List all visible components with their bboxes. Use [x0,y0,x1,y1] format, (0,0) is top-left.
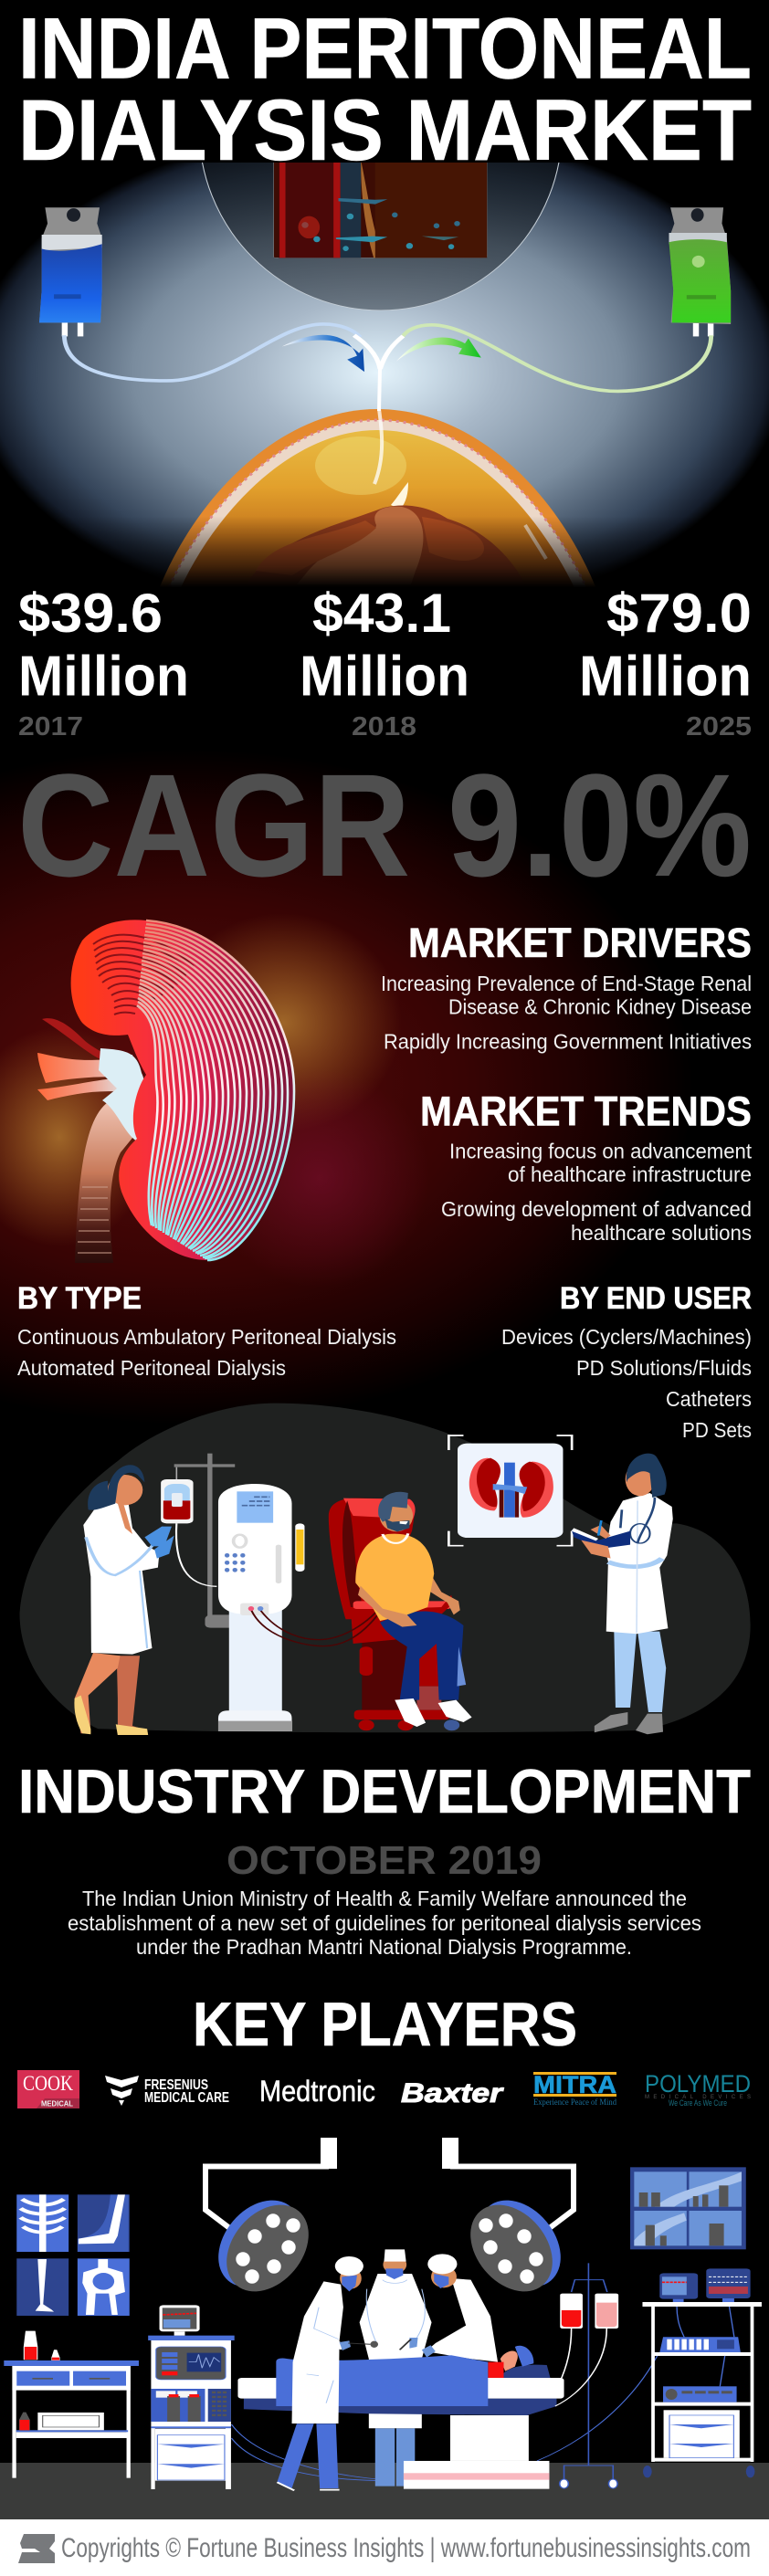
by type: BY TYPE [17,1281,142,1316]
dialysis chair [329,1498,459,1730]
right dialysate bag (green) [669,207,731,336]
market drivers: MARKET DRIVERS [408,920,752,966]
arrow: dialysate in [282,335,364,372]
logo: Cook Medical: COOK [23,2072,73,2095]
market value: 2017: $39.6 [18,583,163,644]
IV drip stand [555,2263,618,2488]
surgeon middle [360,2249,432,2487]
market value: 2025: Million [579,645,752,709]
logo: Fresenius Medical Care: MEDICAL CARE [144,2090,229,2106]
side table left [4,2331,139,2478]
by end user: PD Sets [682,1418,752,1442]
IV stand [161,1454,235,1628]
market drivers [381,920,752,1054]
market trends: Growing development of advanced [441,1197,752,1221]
by end user [501,1281,752,1442]
footer logo [18,2534,55,2563]
ureter and vessels [37,1018,144,1263]
arrow: dialysate out [396,338,481,362]
industry development description: under the Pradhan Mantri National Dialysis Programme. [136,1935,632,1959]
left dialysate bag (blue) [39,207,102,336]
red glow background with kidney [0,749,694,1425]
logo: Fresenius Medical Care [105,2076,229,2106]
market trends: healthcare solutions [571,1221,752,1245]
market trends: Increasing focus on advancement [449,1140,753,1163]
abdomen cross-section [157,409,598,594]
industry development description [68,1887,701,1959]
by end user: PD Solutions/Fluids [576,1356,752,1380]
market value: 2025: 2025 [686,712,752,741]
surgical lamp right [442,2138,577,2308]
logo: Polymed: MEDICAL DEVICES [645,2095,751,2100]
footer [0,2519,769,2576]
logo: Polymed [645,2070,751,2108]
equipment cart middle [148,2305,235,2489]
doctor left [74,1465,174,1735]
industry development date: OCTOBER 2019 [226,1838,542,1883]
operating room illustration [4,2167,762,2490]
magnifier circle [202,163,559,310]
by end user: Catheters [666,1387,752,1411]
background blob [19,1404,751,1732]
hero illustration: peritoneal dialysis [0,163,769,585]
logo: Polymed: We Care As We Cure [669,2098,727,2108]
logo: Baxter: Baxter [401,2078,505,2108]
industry development description: The Indian Union Ministry of Health & Family Welfare announced the [82,1887,687,1910]
market value: 2017 [18,583,189,741]
market drivers: Increasing Prevalence of End-Stage Renal [381,972,752,995]
logo: Mitra: Experience Peace of Mind [533,2098,616,2107]
market value: 2017: Million [18,645,189,709]
logo: Mitra: MITRA [533,2071,616,2098]
dialysis machine [218,1484,304,1731]
logos [17,2070,751,2108]
medicine cabinet [630,2167,746,2249]
logo: Fresenius Medical Care: FRESENIUS [144,2077,208,2093]
patient on table [276,2346,551,2406]
clinic illustration [19,1404,751,1735]
kidney scan card [448,1435,572,1546]
kidney contour lines [137,920,294,1260]
surgeon right [422,2254,498,2362]
market value: 2025: $79.0 [606,583,752,644]
kidney upper lobe dark contour lines [93,935,194,1015]
title [18,0,752,179]
by end user: Devices (Cyclers/Machines) [501,1325,752,1349]
by type: Automated Peritoneal Dialysis [17,1356,286,1380]
logo: Cook Medical [17,2070,79,2108]
market value: 2017: 2017 [18,712,83,741]
operating table [237,2378,564,2489]
industry development description: establishment of a new set of guidelines for peritoneal dialysis services [68,1911,701,1935]
by end user: BY END USER [560,1281,752,1316]
market value: 2025 [579,583,752,741]
floor [0,2463,769,2519]
cables [231,2356,658,2481]
patient [355,1492,472,1727]
by type: Continuous Ambulatory Peritoneal Dialysis [17,1325,396,1349]
monitoring cart right [642,2268,762,2477]
doctor right [572,1454,673,1734]
catheter stem [379,369,380,411]
kidney illustration [37,920,294,1263]
logo: Medtronic: Medtronic [259,2075,375,2108]
logo: Cook Medical: MEDICAL [41,2098,73,2108]
market drivers: Disease & Chronic Kidney Disease [448,995,752,1019]
market value: 2018: $43.1 [312,583,451,644]
market drivers: Rapidly Increasing Government Initiatives [384,1030,752,1054]
catheter tubes [64,324,711,391]
tube lines [251,1607,384,1646]
market value: 2018 [300,583,469,741]
key players heading: KEY PLAYERS [193,1990,577,2059]
market value: 2018: Million [300,645,469,709]
market trends: MARKET TRENDS [420,1088,752,1134]
market trends [420,1088,753,1245]
by type [17,1281,396,1380]
x-ray panels [16,2194,130,2316]
surgical lamp left [202,2138,337,2308]
surgeon left [277,2256,378,2490]
market value: 2018: 2018 [352,712,416,741]
logo: Polymed: POLYMED [645,2070,751,2098]
market trends: of healthcare infrastructure [508,1162,752,1186]
